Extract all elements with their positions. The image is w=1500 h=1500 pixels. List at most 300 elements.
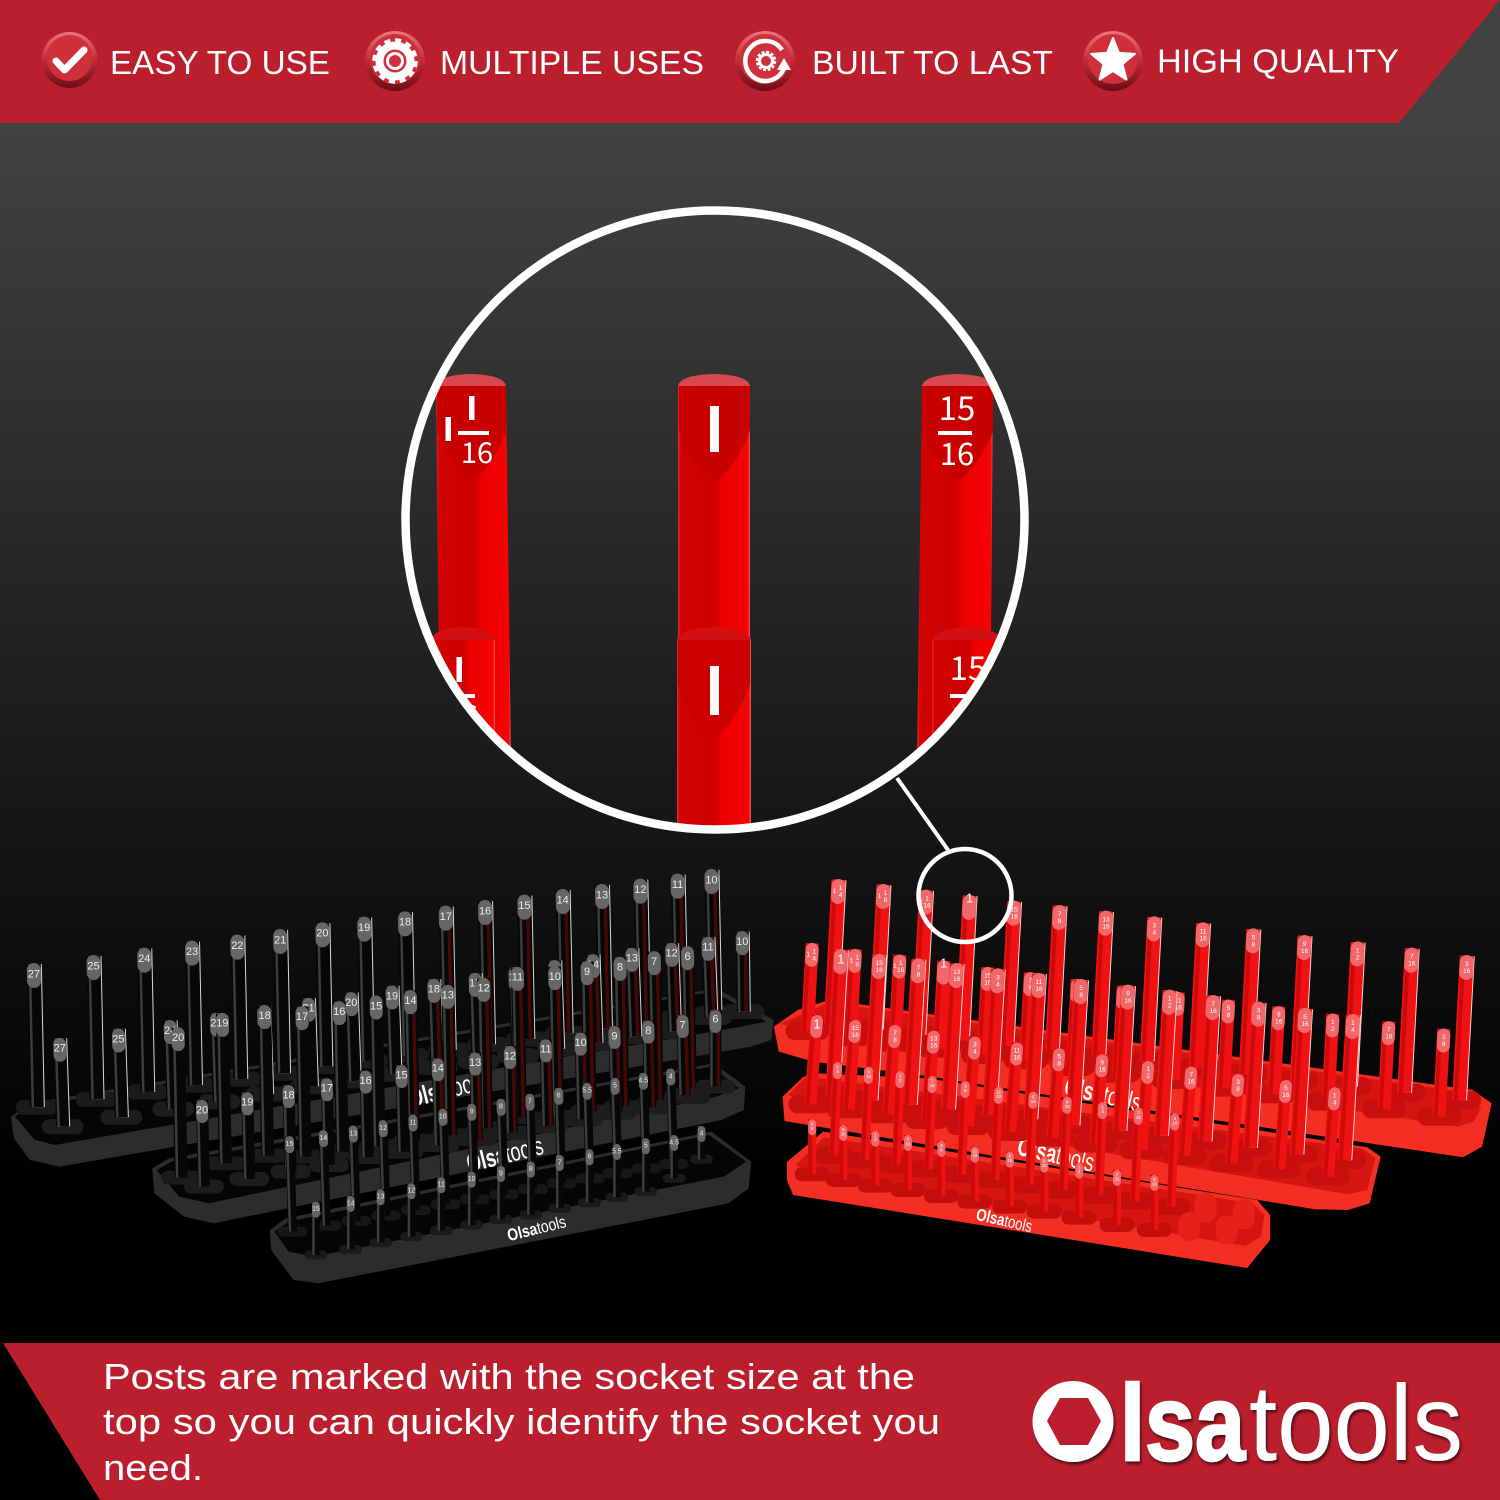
posts and sockets: 19 (241, 1097, 253, 1109)
posts and sockets: 1 (893, 963, 897, 970)
posts and sockets: 16 (360, 1075, 372, 1087)
brand logo: O (1033, 1362, 1113, 1483)
posts and sockets: 8 (1252, 941, 1256, 948)
posts and sockets: 4 (700, 1130, 704, 1137)
posts and sockets: 3 (1442, 1034, 1446, 1041)
posts and sockets: 13 (1074, 984, 1081, 991)
rack logo: Olsatools (974, 1205, 1034, 1236)
posts and sockets: 25 (87, 960, 100, 972)
posts and sockets: 16 (1200, 935, 1207, 942)
posts and sockets: 5 (1057, 1053, 1061, 1060)
posts and sockets: 15 (370, 1000, 382, 1012)
post: 15/16 back: 15 (939, 382, 975, 430)
posts and sockets: 11 (512, 972, 523, 984)
posts and sockets: 8 (617, 962, 623, 974)
posts and sockets: 32 (1136, 1115, 1142, 1120)
posts and sockets: 11 (672, 879, 683, 891)
posts and sockets: 16 (1172, 1120, 1178, 1125)
post: 1 front: 1 (695, 639, 734, 735)
posts and sockets: 1 (899, 960, 903, 967)
posts and sockets: 11 (996, 1089, 1002, 1094)
posts and sockets: 4 (1121, 998, 1125, 1005)
icon: check mark (42, 32, 98, 88)
rack body (787, 1132, 1270, 1268)
posts and sockets: 16 (1210, 1008, 1217, 1015)
posts and sockets: 5 (1252, 934, 1256, 941)
posts and sockets: 11 (438, 1182, 445, 1189)
posts and sockets: 14 (404, 995, 417, 1007)
posts and sockets: 6 (557, 1093, 561, 1100)
banner shape (0, 0, 1500, 123)
black socket racks (11, 870, 774, 1283)
posts and sockets: 16 (984, 979, 992, 986)
posts and sockets: 11 (1014, 1048, 1021, 1055)
posts and sockets: 12 (634, 884, 646, 896)
posts and sockets: 5.5 (582, 1088, 592, 1095)
posts and sockets: 9 (1277, 1012, 1281, 1019)
posts and sockets: 13 (953, 969, 961, 976)
posts and sockets: 19 (216, 1018, 228, 1030)
posts and sockets: 10 (705, 874, 718, 886)
posts and sockets: 5 (1079, 985, 1083, 992)
posts and sockets: 1 (855, 954, 859, 961)
posts and sockets: 9 (499, 1170, 503, 1177)
posts and sockets: 9 (470, 1109, 474, 1116)
posts and sockets: 3 (973, 1042, 977, 1049)
caption text: top so you can quickly identify the socket you (103, 1401, 940, 1442)
posts and sockets: 15 (395, 1069, 408, 1081)
feature: easy to use (42, 32, 330, 88)
posts and sockets: 14 (432, 1063, 444, 1075)
posts and sockets: 13 (377, 1194, 385, 1201)
posts and sockets: 16 (1175, 1004, 1182, 1011)
posts and sockets: 16 (1301, 1021, 1309, 1028)
posts and sockets: 9 (1303, 941, 1307, 948)
banner shape (3, 1343, 1500, 1500)
posts and sockets: 8 (1079, 992, 1083, 999)
posts and sockets: 7 (1189, 1072, 1193, 1079)
rack body (270, 1132, 751, 1283)
posts and sockets: 1 (1168, 996, 1172, 1003)
posts and sockets: 3 (1153, 922, 1157, 929)
posts and sockets: 11 (540, 1044, 551, 1056)
posts and sockets: 15 (876, 960, 883, 967)
posts and sockets: 7 (558, 1159, 562, 1166)
posts and sockets: 16 (1031, 1099, 1036, 1104)
posts and sockets: 16 (876, 967, 883, 974)
bottom banner (3, 1343, 1500, 1500)
posts and sockets: 8 (917, 971, 921, 978)
rack logo: Olsatools (505, 1212, 568, 1245)
post: 15/16 back (917, 374, 993, 760)
posts and sockets: 9 (1100, 1059, 1104, 1066)
posts and sockets: 7 (907, 1137, 910, 1142)
posts and sockets: 32 (1115, 1176, 1120, 1181)
posts and sockets: 4 (1101, 1109, 1104, 1114)
posts and sockets: 7 (1137, 1110, 1140, 1115)
posts and sockets: 10 (574, 1037, 587, 1049)
posts and sockets: 2 (899, 1078, 902, 1083)
posts and sockets: 1 (884, 890, 888, 897)
posts and sockets: 27 (54, 1043, 66, 1055)
posts and sockets: 1 (1101, 1105, 1104, 1110)
red rack: back 3/8-1 1/4 (774, 880, 1492, 1157)
posts and sockets: 1 (1356, 947, 1360, 954)
posts and sockets: 13 (469, 1057, 481, 1069)
posts and sockets: 2 (1331, 1026, 1335, 1033)
rack logo: Olsatools (463, 1130, 546, 1178)
post: 1 1/16 back (436, 374, 511, 760)
posts and sockets: 8 (855, 961, 859, 968)
posts and sockets: 11 (702, 942, 714, 954)
posts and sockets (168, 947, 728, 1193)
posts and sockets: 4 (1333, 1099, 1337, 1106)
posts and sockets: 5 (836, 1065, 839, 1070)
rack logo: Olsatools (1015, 1131, 1097, 1178)
posts and sockets: 7 (1116, 1172, 1119, 1177)
posts and sockets: 8 (940, 1147, 943, 1152)
posts and sockets: 16 (333, 1006, 345, 1018)
posts and sockets: 12 (666, 948, 678, 960)
posts and sockets: 5 (644, 1143, 648, 1150)
posts and sockets: 1 (806, 951, 810, 958)
posts and sockets: 16 (1282, 1092, 1290, 1099)
posts and sockets: 7 (893, 1030, 897, 1037)
post: 15/16 front: 16 (951, 692, 985, 737)
posts and sockets: 1 (812, 948, 816, 955)
posts and sockets: 10 (468, 1176, 476, 1183)
posts and sockets: 7 (1211, 1001, 1215, 1008)
posts and sockets: 1 (940, 956, 947, 971)
posts and sockets: 4 (973, 1049, 977, 1056)
posts and sockets: 1 (1078, 1165, 1081, 1170)
posts and sockets (802, 1063, 1244, 1234)
posts and sockets: 7 (680, 1019, 686, 1031)
post: 15/16 front (932, 627, 998, 734)
posts and sockets: 1 (833, 888, 837, 895)
label: easy to use: EASY TO USE (110, 44, 330, 81)
posts and sockets: 32 (1042, 1163, 1047, 1168)
posts and sockets: 32 (972, 1153, 978, 1158)
posts and sockets: 13 (596, 889, 608, 901)
posts and sockets: 16 (1007, 1158, 1013, 1163)
posts and sockets: 15 (549, 965, 561, 977)
posts and sockets: 16 (930, 1083, 935, 1088)
small bit sockets (1189, 1203, 1244, 1233)
posts and sockets: 5 (1303, 1014, 1307, 1021)
posts and sockets: 7 (528, 1099, 532, 1106)
posts and sockets: 1 (899, 1074, 902, 1079)
posts and sockets: 15 (286, 1141, 294, 1148)
posts and sockets: 3 (1153, 1177, 1156, 1182)
posts and sockets: 14 (557, 894, 569, 906)
posts and sockets: 2 (1146, 1073, 1150, 1080)
icon: gear (365, 31, 425, 91)
posts and sockets: 3 (1121, 991, 1125, 998)
top banner (0, 0, 1500, 123)
posts and sockets: 17 (321, 1083, 333, 1095)
posts and sockets: 1 (966, 891, 973, 906)
posts and sockets: 8 (1227, 1012, 1231, 1019)
posts and sockets: 1 (849, 957, 853, 964)
post: 1 1/16 back: 16 (461, 430, 493, 472)
black rack: front 4-15 (270, 1069, 751, 1283)
posts and sockets: 13 (1102, 917, 1110, 924)
posts and sockets: 16 (841, 1131, 846, 1136)
posts and sockets: 5 (613, 1083, 617, 1090)
caption text: Posts are marked with the socket size at the (103, 1356, 915, 1397)
posts and sockets: 24 (138, 953, 150, 965)
rack body (11, 988, 774, 1167)
posts and sockets: 16 (1385, 1034, 1393, 1041)
posts and sockets: 16 (905, 1141, 911, 1146)
posts and sockets: 18 (259, 1010, 271, 1022)
feature: multiple uses (365, 31, 704, 91)
posts and sockets: 17 (440, 911, 452, 923)
posts and sockets: 4 (996, 981, 1000, 988)
posts and sockets: 7 (651, 956, 657, 968)
posts and sockets: 8 (1442, 1041, 1446, 1048)
posts and sockets: 20 (345, 997, 357, 1009)
label: high quality: HIGH QUALITY (1157, 42, 1399, 80)
red rack: front 3/16-5/8 (787, 1063, 1270, 1268)
post: 1 1/16 back: 1 (462, 382, 482, 430)
posts and sockets: 1 (1351, 1020, 1355, 1027)
black rack: back 10-27 (11, 870, 774, 1167)
posts and sockets: 4 (1153, 929, 1157, 936)
posts and sockets: 3 (1465, 961, 1469, 968)
post: 15/16 front: 15 (950, 642, 986, 690)
posts and sockets: 9 (584, 966, 590, 978)
posts and sockets: 1 (837, 951, 845, 966)
posts and sockets: 18 (282, 1089, 295, 1101)
rack logo: Olsatools (405, 1065, 488, 1113)
posts and sockets: 8 (811, 1126, 814, 1131)
posts and sockets: 32 (996, 1094, 1002, 1099)
posts and sockets: 8 (1058, 918, 1062, 925)
feature: built to last (735, 31, 1053, 91)
label: multiple uses: MULTIPLE USES (440, 44, 704, 81)
posts and sockets: 32 (1065, 1104, 1070, 1109)
posts and sockets: 16 (897, 967, 905, 974)
posts and sockets: 27 (28, 968, 40, 980)
posts and sockets: 11 (1175, 997, 1182, 1004)
posts and sockets (797, 950, 1357, 1183)
magnified posts (431, 374, 1002, 838)
posts and sockets: 23 (210, 1018, 223, 1030)
posts and sockets (795, 880, 1472, 1123)
posts and sockets: 1 (878, 893, 882, 900)
caption text: need. (103, 1447, 203, 1488)
posts and sockets: 16 (852, 1032, 859, 1039)
posts and sockets: 1 (1333, 1092, 1337, 1099)
posts and sockets: 20 (316, 928, 328, 940)
posts and sockets: 16 (930, 1043, 938, 1050)
posts and sockets: 8 (1236, 1086, 1240, 1093)
posts and sockets: 13 (930, 1036, 938, 1043)
callout connector line (897, 778, 948, 850)
posts and sockets: 24 (164, 1025, 176, 1037)
posts and sockets: 3 (996, 974, 1000, 981)
posts and sockets: 1 (813, 1016, 821, 1031)
magnified view of post tops (406, 210, 1024, 838)
posts and sockets: 20 (172, 1032, 184, 1044)
posts and sockets: 4 (1351, 1027, 1355, 1034)
posts and sockets: 16 (1074, 991, 1081, 998)
posts and sockets: 16 (509, 972, 521, 984)
posts and sockets: 14 (347, 1200, 355, 1207)
posts and sockets: 9 (1066, 1099, 1069, 1104)
posts and sockets: 16 (1152, 1181, 1157, 1186)
posts and sockets: 16 (1099, 1066, 1106, 1073)
red socket racks (774, 880, 1492, 1268)
posts and sockets: 13 (349, 1130, 357, 1137)
black rack: middle 6-20 (152, 947, 745, 1223)
brand logo: lsa (1120, 1362, 1246, 1483)
posts and sockets: 18 (399, 917, 411, 929)
posts and sockets: 3 (964, 1084, 967, 1089)
posts and sockets: 8 (529, 1166, 533, 1173)
post: 1 back: 1 (696, 380, 733, 471)
posts and sockets: 5 (1284, 1085, 1288, 1092)
posts and sockets: 8 (893, 1037, 897, 1044)
posts and sockets: 25 (112, 1033, 125, 1045)
posts and sockets: 8 (964, 1088, 967, 1093)
posts and sockets: 16 (1188, 1079, 1195, 1086)
posts and sockets: 7 (1410, 954, 1414, 961)
posts and sockets: 1 (1331, 1019, 1335, 1026)
posts and sockets: 7 (1058, 911, 1062, 918)
posts and sockets: 21 (274, 934, 286, 946)
posts and sockets (283, 1069, 708, 1259)
posts and sockets: 8 (884, 897, 888, 904)
posts and sockets: 14 (587, 959, 599, 971)
posts and sockets: 16 (1463, 968, 1471, 975)
posts and sockets: 16 (953, 976, 961, 983)
posts and sockets: 10 (549, 971, 561, 983)
post: 1 1/16 front (432, 627, 495, 732)
posts and sockets: 1 (874, 1133, 877, 1138)
posts and sockets: 3 (940, 1143, 943, 1148)
posts and sockets: 9 (1126, 991, 1130, 998)
post: 1 1/16 front: 16 (446, 693, 478, 735)
label: built to last: BUILT TO LAST (812, 44, 1053, 81)
posts and sockets: 8 (836, 1069, 839, 1074)
posts and sockets: 16 (479, 905, 491, 917)
posts and sockets: 2 (874, 1137, 877, 1142)
posts and sockets: 15 (1011, 907, 1018, 914)
posts and sockets: 12 (477, 983, 490, 995)
posts and sockets: 17 (296, 1011, 308, 1023)
caption text (103, 1356, 940, 1488)
posts and sockets: 1 (1146, 1066, 1150, 1073)
posts and sockets: 16 (1013, 1055, 1021, 1062)
posts and sockets: 21 (302, 1003, 315, 1015)
posts and sockets: 16 (1124, 998, 1132, 1005)
posts and sockets: 19 (386, 990, 398, 1002)
posts and sockets: 13 (442, 990, 454, 1002)
posts and sockets: 14 (319, 1135, 327, 1142)
posts and sockets: 12 (408, 1188, 415, 1195)
posts and sockets: 11 (409, 1119, 417, 1126)
posts and sockets: 6 (684, 951, 691, 963)
post: 1 1/16 back: 1 (438, 403, 458, 451)
icon: arrow around gear (735, 31, 795, 91)
posts and sockets: 1 (919, 899, 923, 906)
brand logo (1032, 1362, 1463, 1483)
posts and sockets: 6 (588, 1154, 592, 1161)
posts and sockets: 16 (1275, 1019, 1283, 1026)
posts and sockets: 16 (1035, 986, 1043, 993)
posts and sockets: 2 (1168, 1003, 1172, 1010)
posts and sockets: 11 (973, 1149, 978, 1154)
post: 15/16 back: 16 (940, 429, 974, 474)
posts and sockets: 16 (923, 903, 931, 910)
posts and sockets: 12 (504, 1050, 516, 1062)
magnifier ring (406, 210, 1024, 830)
posts and sockets (23, 870, 757, 1133)
posts and sockets: 4 (839, 892, 843, 899)
posts and sockets: 15 (852, 1025, 859, 1032)
rack body (152, 1063, 745, 1223)
red rack: middle 1/4-1 (783, 950, 1381, 1210)
posts and sockets: 3 (1257, 1008, 1261, 1015)
posts and sockets: 19 (358, 922, 370, 934)
posts and sockets: 7 (1029, 978, 1033, 985)
posts and sockets: 15 (312, 1206, 320, 1213)
posts and sockets: 9 (611, 1030, 617, 1042)
posts and sockets: 15 (518, 900, 530, 912)
posts and sockets: 16 (1011, 914, 1018, 921)
posts and sockets: 22 (231, 940, 243, 952)
posts and sockets: 10 (439, 1114, 447, 1121)
posts and sockets: 5 (1009, 1154, 1012, 1159)
posts and sockets: 20 (196, 1104, 208, 1116)
feature: high quality (1083, 31, 1399, 91)
posts and sockets: 6 (712, 1014, 718, 1026)
posts and sockets: 16 (1102, 924, 1110, 931)
post: 1 1/16 front: 1 (449, 644, 469, 692)
posts and sockets: 9 (842, 1127, 845, 1132)
posts and sockets: 1 (925, 896, 929, 903)
posts and sockets: 5 (1032, 1094, 1035, 1099)
posts and sockets: 15 (984, 972, 992, 979)
posts and sockets: 4 (812, 955, 816, 962)
rack body (774, 1000, 1492, 1157)
posts and sockets: 3 (1174, 1116, 1177, 1121)
posts and sockets: 16 (1301, 948, 1309, 955)
posts and sockets: 7 (917, 964, 921, 971)
posts and sockets: 8 (1257, 1015, 1261, 1022)
posts and sockets: 7 (931, 1079, 934, 1084)
posts and sockets: 5.5 (612, 1148, 622, 1155)
posts and sockets: 4.5 (669, 1139, 679, 1146)
callout small circle (918, 849, 1012, 942)
posts and sockets: 5 (811, 1121, 814, 1126)
posts and sockets: 8 (1057, 1060, 1061, 1067)
posts and sockets: 9 (1043, 1159, 1046, 1164)
posts and sockets: 12 (379, 1125, 387, 1132)
posts and sockets: 13 (626, 953, 638, 965)
rack body (783, 1073, 1381, 1210)
icon: star (1083, 31, 1143, 91)
posts and sockets: 4 (1078, 1169, 1081, 1174)
posts and sockets: 16 (866, 1074, 872, 1079)
posts and sockets: 8 (499, 1104, 503, 1111)
posts and sockets: 4 (669, 1073, 673, 1080)
posts and sockets: 16 (1408, 961, 1416, 968)
posts and sockets: 11 (1036, 979, 1043, 986)
